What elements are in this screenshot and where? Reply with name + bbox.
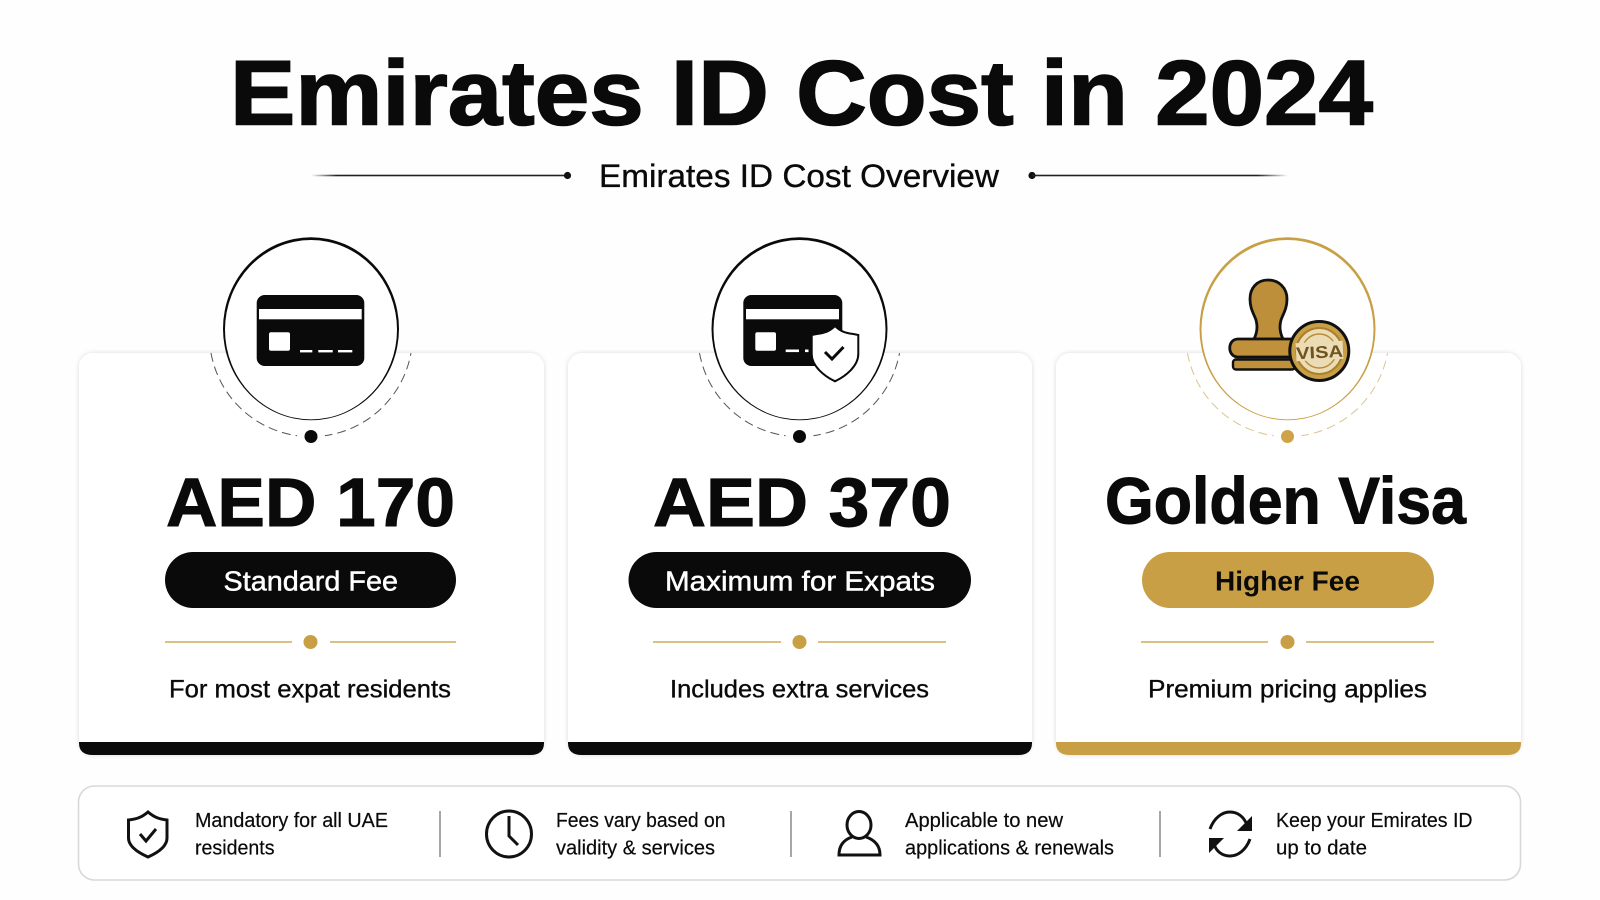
subtitle with rules (311, 158, 1288, 194)
text: keep up to date: Keep your Emirates ID (1276, 809, 1472, 832)
description: Premium pricing applies (1148, 676, 1427, 704)
text: fees vary (556, 809, 726, 860)
text: applicable: applications & renewals (905, 836, 1114, 860)
subtitle with rules: Emirates ID Cost Overview (599, 158, 1000, 194)
text: keep up to date: up to date (1276, 836, 1367, 860)
price: AED 170 (166, 464, 455, 541)
gold divider (1141, 635, 1434, 649)
description: For most expat residents (169, 676, 451, 704)
icon circle (1200, 237, 1376, 420)
gold divider (165, 635, 456, 649)
panel: notes strip (78, 786, 1520, 880)
strip frame (78, 786, 1520, 880)
text: mandatory: residents (195, 836, 274, 860)
text: mandatory (195, 809, 388, 860)
text: applicable: Applicable to new (905, 809, 1063, 832)
description: Includes extra services (670, 676, 929, 704)
pill: higher fee (1142, 552, 1434, 608)
note: applicable (839, 809, 1114, 860)
note: keep up to date (1209, 809, 1472, 860)
text: applicable (905, 809, 1114, 860)
title: Emirates ID Cost in 2024 (230, 42, 1373, 144)
icon: clock (486, 811, 532, 857)
pill: higher fee: Higher Fee (1215, 566, 1360, 596)
icon: visa stamp: VISA (1296, 342, 1344, 363)
panel: golden visa (1056, 237, 1521, 755)
text: keep up to date (1276, 809, 1472, 860)
card base (568, 353, 1032, 755)
pill: standard fee: Standard Fee (224, 566, 398, 596)
dashed arc and dot (211, 353, 411, 450)
text: fees vary: Fees vary based on (556, 809, 726, 832)
card base (79, 353, 544, 755)
card base (1056, 353, 1521, 755)
dashed arc and dot (700, 353, 900, 450)
icon: credit card (257, 295, 364, 366)
panel: standard fee (79, 237, 544, 755)
icon: visa stamp (1230, 280, 1349, 380)
pill: maximum for expats (628, 552, 971, 608)
pill: maximum for expats: Maximum for Expats (665, 566, 935, 596)
panel: maximum for expats (568, 237, 1032, 755)
pill: standard fee (165, 552, 456, 608)
icon: card with shield (743, 295, 858, 381)
note: fees vary (486, 809, 726, 860)
dashed arc and dot (1188, 353, 1388, 450)
icon: refresh arrows (1209, 812, 1252, 856)
price: AED 370 (653, 464, 951, 541)
heading: Golden Visa (1105, 464, 1467, 538)
note: mandatory (128, 809, 388, 860)
text: mandatory: Mandatory for all UAE (195, 809, 388, 832)
icon circle (712, 237, 888, 420)
text: fees vary: validity & services (556, 836, 715, 860)
icon: person (839, 812, 880, 855)
icon circle (223, 237, 399, 420)
icon: shield (128, 812, 167, 857)
gold divider (653, 635, 946, 649)
